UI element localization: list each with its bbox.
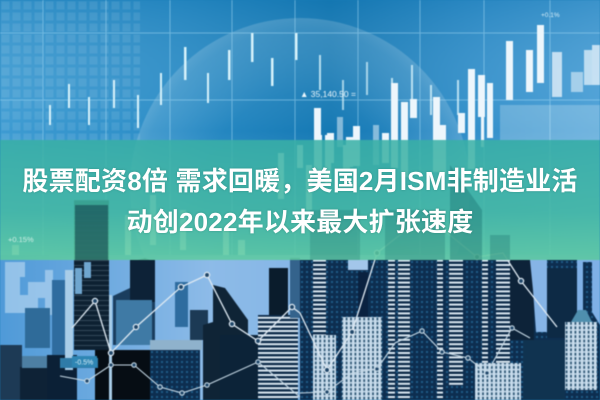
label: top right percentage: +0.1% xyxy=(541,12,560,19)
chart: thin candlestick wicks xyxy=(49,33,459,128)
title xyxy=(22,166,578,237)
title: 动创2022年以来最大扩张速度 xyxy=(127,207,473,237)
chart: white candlestick bodies xyxy=(12,25,600,275)
chart: upper trend line xyxy=(72,215,557,373)
panel: teal title band: +0.15% xyxy=(8,235,34,244)
label: percentage tag: -0.5% xyxy=(75,360,93,366)
title: 股票配资8倍 需求回暖，美国2月ISM非制造业活 xyxy=(22,166,578,196)
label: percentage tag xyxy=(72,356,97,367)
panel: teal title band xyxy=(0,140,600,260)
label: index value: ▲ 35,140.50 = xyxy=(300,89,356,99)
chart: lower trend line xyxy=(60,326,530,397)
panel: city skyline xyxy=(0,200,600,400)
